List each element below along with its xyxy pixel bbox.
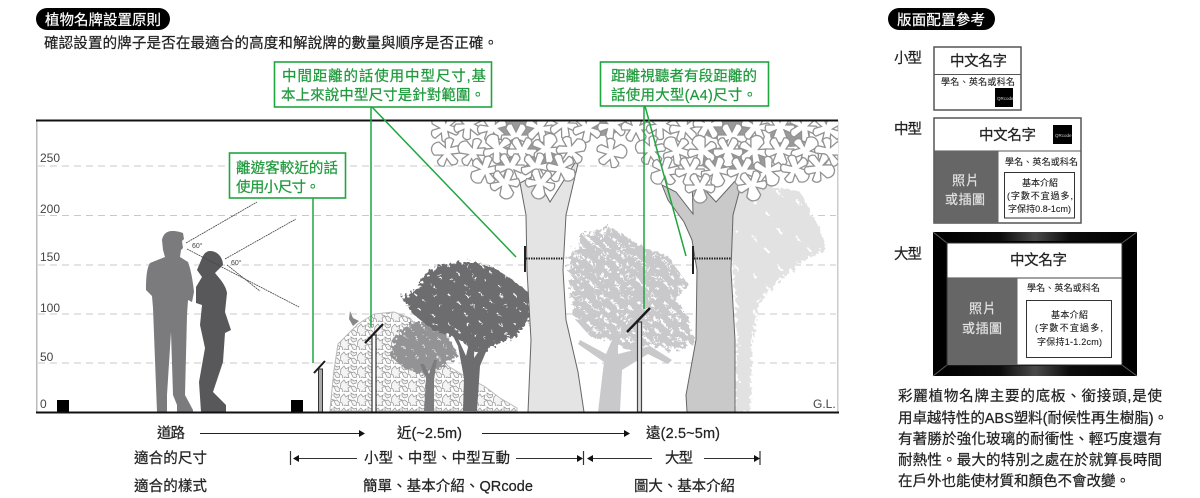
layout: large sign with black frame: 大型 [894,246,922,263]
tree canopy: leaf clusters across the top [430,122,838,204]
sight lines: 60 degree view angles: 60° [231,259,242,267]
layout: medium sign: 中型 [894,121,922,138]
text block: material description: 有著勝於強化玻璃的耐衝性、輕巧度還有 [898,430,1162,448]
sight lines: 60 degree view angles: 60° [192,242,203,250]
layout: large sign with black frame: 學名、英名或科名 [1027,282,1100,293]
sight lines: 60 degree view angles [186,202,299,307]
medium sign on post [365,324,383,412]
callout: large sign [600,62,768,309]
layout: small sign: 小型 [894,50,922,67]
layout: small sign: 學名、英名或科名 [941,76,1015,87]
layout: large sign with black frame: 中文名字 [1010,252,1067,269]
shrub: outlined foreground bush [330,312,517,411]
style row: suitable sign styles: 簡單、基本介紹、QRcode [363,478,533,495]
chart grid and height scale: 50 [40,350,54,364]
callout: large sign: 話使用大型(A4)尺寸。 [611,87,757,104]
callout: small sign [230,153,346,363]
callout: medium sign [274,62,516,327]
text block: material description: 耐熱性。最大的特別之處在於就算長時間 [898,452,1162,469]
layout: medium sign: QRcode [1055,133,1072,138]
tree: dark gray tree [349,261,531,411]
layout: small sign [894,47,1021,110]
tree: large foreground tree trunk with sign [520,155,584,412]
layout: medium sign: (字數不宜過多, [1007,190,1073,201]
chart grid and height scale: 250 [40,151,60,165]
chart grid and height scale: 150 [40,250,60,264]
heading pill: placement principles: 植物名牌設置原則 [45,12,161,29]
intro text: 確認設置的牌子是否在最適合的高度和解說牌的數量與順序是否正確。 [44,34,498,52]
chart grid and height scale: 0 [40,397,47,411]
text block: material description: 用卓越特性的ABS塑料(耐候性再生樹脂)。 [898,410,1168,427]
distance row: road near far: 道路 [157,425,186,442]
style row: suitable sign styles: 圖大、基本介紹 [634,478,735,495]
callout: small sign: 使用小尺寸。 [236,179,320,196]
text block: material description [898,388,1168,490]
text block: material description: 在戶外也能使材質和顏色不會改變。 [898,472,1130,490]
distance row: road near far [157,425,720,442]
layout: medium sign: 中文名字 [979,127,1036,144]
layout: large sign with black frame: 字保持1-1.2cm) [1037,336,1102,347]
size row: suitable sign sizes: 大型 [665,450,693,467]
road markers: black squares [57,400,303,412]
size row: suitable sign sizes: 適合的尺寸 [134,449,207,467]
heading pill: placement principles [36,8,170,30]
layout: medium sign [894,118,1081,223]
size row: suitable sign sizes [134,449,760,467]
style row: suitable sign styles [134,477,735,495]
chart grid and height scale: 200 [40,202,60,216]
layout: large sign with black frame: 或插圖 [962,321,1002,336]
distance row: road near far: 近(~2.5m) [397,425,462,442]
person: woman silhouette [196,251,231,412]
height chart [36,103,849,413]
layout: medium sign: 照片 [952,173,979,188]
layout: small sign: QRcode [997,96,1014,101]
callout: medium sign: 本上來說中型尺寸是針對範圍。 [281,86,485,104]
distance row: road near far: 遠(2.5~5m) [646,425,720,442]
heading pill: layout reference [888,8,995,30]
style row: suitable sign styles: 適合的樣式 [134,477,208,495]
tree: light gray mid-distance tree [570,228,694,412]
callout: medium sign: 中間距離的話使用中型尺寸,基 [282,67,486,85]
tree: medium gray tree [390,322,458,411]
layout: medium sign: 字保持0.8-1cm) [1008,203,1071,214]
layout: large sign with black frame [894,232,1137,376]
heading pill: layout reference: 版面配置參考 [897,12,985,29]
layout: medium sign: 基本介紹 [1022,177,1058,188]
chart grid and height scale: G.L. [813,397,836,411]
layout: small sign: 中文名字 [950,53,1007,70]
tree: second large tree trunk with sign [662,170,745,412]
layout: large sign with black frame: (字數不宜過多, [1035,322,1103,333]
small sign on post [314,361,325,412]
size row: suitable sign sizes: 小型、中型、中型互動 [364,450,510,467]
tree: faint background tree [726,186,826,412]
layout: large sign with black frame: 基本介紹 [1051,309,1088,320]
layout: medium sign: 學名、英名或科名 [1005,156,1078,167]
callout: large sign: 距離視聽者有段距離的 [611,67,757,85]
chart grid and height scale [36,120,838,412]
layout: large sign with black frame: 照片 [969,301,996,316]
callout: small sign: 離遊客較近的話 [236,159,338,177]
chart top and ground lines [36,120,839,414]
chart grid and height scale: 100 [40,301,60,315]
person: man silhouette [146,231,194,412]
text block: material description: 彩麗植物名牌主要的底板、銜接頭,是使 [898,388,1162,405]
large sign on post [627,308,650,412]
layout: medium sign: 或插圖 [945,192,985,207]
